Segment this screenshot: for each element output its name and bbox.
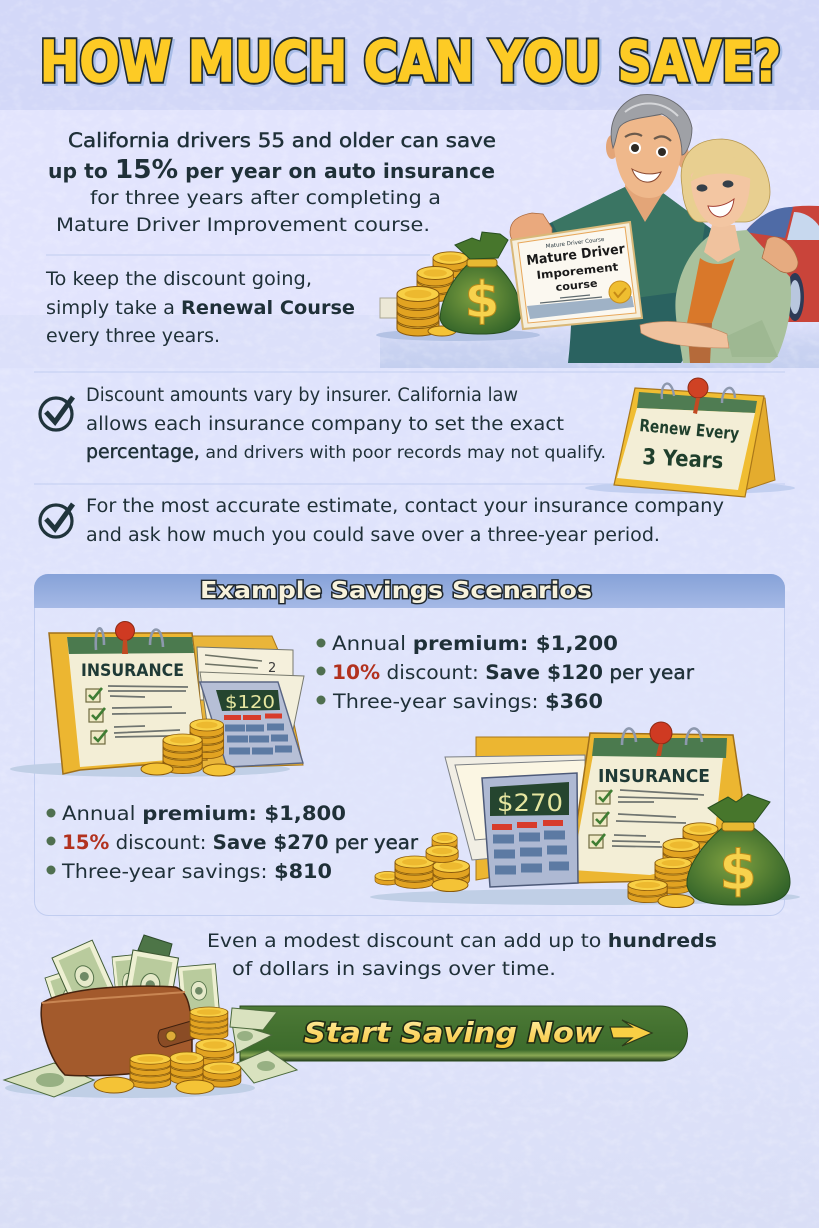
check item: discount amounts vary — [40, 385, 606, 463]
icon: coin stacks and money bag: $ — [465, 271, 499, 329]
check item: accurate estimate — [40, 496, 724, 546]
scenario 2 list: 15% discount: Save $270 per year — [62, 831, 419, 854]
calculator — [482, 773, 578, 887]
intro text block — [48, 129, 496, 236]
icon: car — [745, 206, 819, 322]
scenario 2 list: Annual premium: $1,800 — [62, 802, 346, 825]
calculator: $270 — [497, 789, 563, 817]
icon: check mark — [40, 504, 73, 537]
certificate: Imporement — [536, 260, 619, 282]
scenario 1 list: Three-year savings: $360 — [332, 690, 603, 713]
calculator: $120 — [225, 692, 275, 713]
icon: money bag — [687, 794, 790, 905]
man — [510, 95, 760, 363]
check item: discount amounts vary: allows each insurance company to set the exact — [86, 414, 564, 435]
scenario 1 list: 10% discount: Save $120 per year — [332, 661, 695, 684]
closing statement — [207, 930, 717, 980]
icon: coin stacks and money bag — [376, 232, 540, 341]
illustration: insurance calendar $120: INSURANCE — [81, 661, 184, 681]
icon: check mark — [40, 397, 73, 430]
illustration: smiling couple — [510, 95, 798, 363]
certificate — [511, 222, 642, 329]
certificate: Mature Driver — [526, 241, 626, 269]
panel: example savings scenarios — [10, 574, 800, 916]
closing statement: Even a modest discount can add up to hundreds — [207, 930, 717, 952]
intro text block: Mature Driver Improvement course. — [56, 214, 430, 236]
scenario 1 list — [316, 632, 695, 713]
panel header — [34, 574, 785, 608]
intro text block: for three years after completing a — [90, 187, 441, 209]
renewal text block: every three years. — [46, 325, 220, 347]
illustration: insurance calendar $270 — [370, 722, 800, 908]
bills on the ground — [4, 1008, 297, 1097]
certificate: Mature Driver Course — [546, 237, 605, 250]
woman — [640, 139, 798, 363]
icon: money bag: $ — [719, 839, 757, 902]
scenario 1 list: Annual premium: $1,200 — [332, 632, 618, 655]
renewal text block: To keep the discount going, — [45, 268, 312, 290]
renewal text block — [45, 268, 355, 347]
icon: renew every 3 years calendar: Renew Every — [639, 416, 740, 445]
intro text block: up to 15% per year on auto insurance — [48, 155, 495, 185]
icon: arrow — [610, 1020, 652, 1046]
check item: accurate estimate: For the most accurate estimate, contact your insurance company — [86, 496, 724, 517]
check item: discount amounts vary: percentage, and drivers with poor records may not qualify. — [86, 442, 606, 463]
calculator — [200, 682, 303, 767]
renewal text block: simply take a Renewal Course — [46, 297, 355, 319]
illustration: wallet with cash and coins — [4, 935, 297, 1098]
certificate: course — [555, 278, 598, 294]
icon: renew every 3 years calendar: 3 Years — [642, 445, 724, 474]
scenario 2 list: Three-year savings: $810 — [61, 860, 332, 883]
illustration: insurance calendar $270: INSURANCE — [598, 766, 710, 787]
icon: renew every 3 years calendar — [585, 378, 795, 497]
button: start saving now — [240, 1006, 688, 1061]
closing statement: of dollars in savings over time. — [232, 958, 556, 980]
bills in the wallet — [45, 935, 220, 1034]
intro text block: California drivers 55 and older can save — [68, 129, 496, 152]
illustration: insurance calendar $120: 2 — [268, 661, 276, 676]
button: start saving now: Start Saving Now — [304, 1016, 602, 1049]
illustration: insurance calendar $120 — [10, 622, 304, 777]
scenario 2 list — [46, 802, 419, 883]
check item: discount amounts vary: Discount amounts vary by insurer. California law — [86, 385, 518, 406]
check item: accurate estimate: and ask how much you could save over a three-year period. — [86, 525, 660, 546]
heading: Example Savings Scenarios — [200, 578, 592, 604]
